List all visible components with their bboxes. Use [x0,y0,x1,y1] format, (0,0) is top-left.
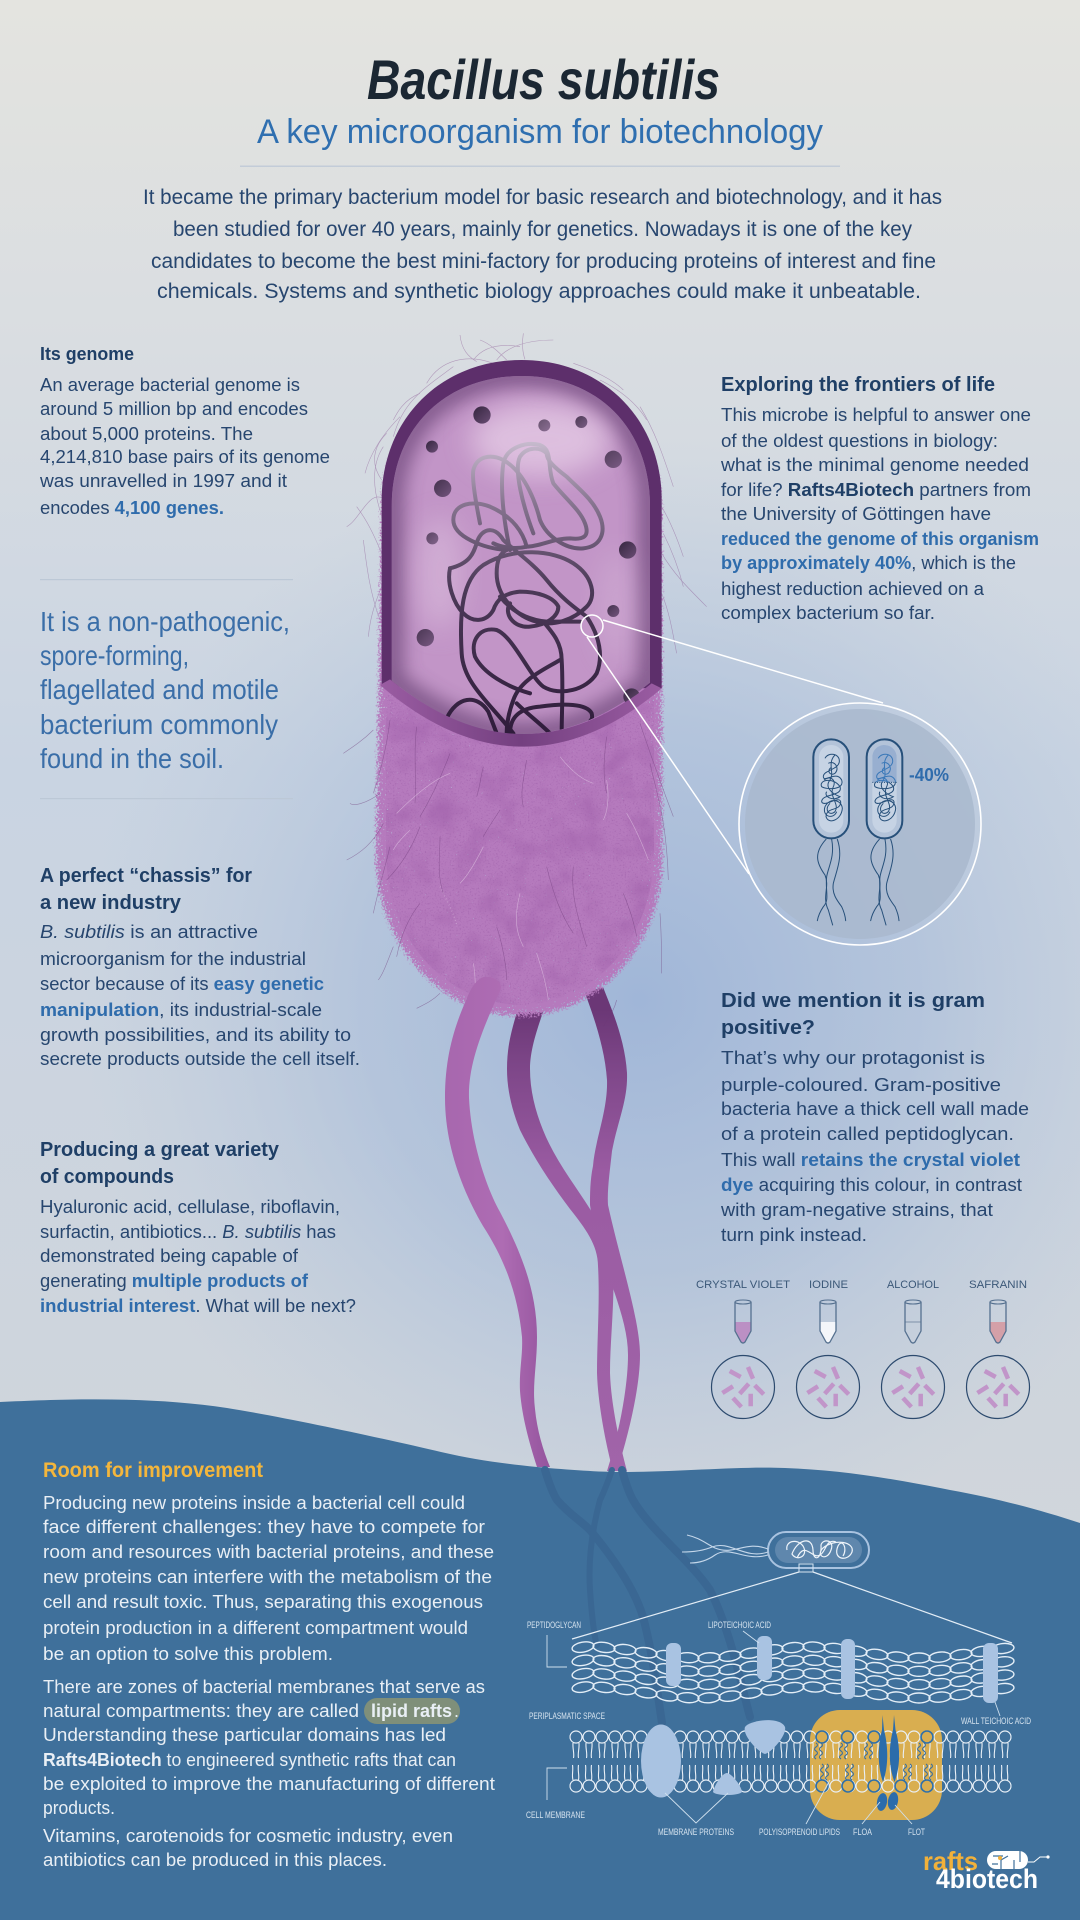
step: crystal violet [696,1279,790,1418]
text block: exploring the frontiers: of the oldest questions in biology: [721,431,998,451]
text block: compounds: Producing a great variety [40,1138,280,1161]
heading: room for improvement: Room for improvement [43,1459,263,1482]
intro paragraph: candidates to become the best mini-factory for producing proteins of interest and fine [151,249,936,273]
diagram labels: PEPTIDOGLYCAN [527,1620,581,1630]
diagram labels: POLYISOPRENOID LIPIDS [759,1827,840,1837]
text block: gram positive: dye acquiring this colour, in contrast [721,1175,1022,1195]
text block: compounds: Hyaluronic acid, cellulase, riboflavin, [40,1197,340,1217]
diagram labels: FLOT [908,1827,925,1837]
text block: compounds [40,1138,356,1316]
diagram labels: CELL MEMBRANE [526,1810,585,1820]
text block: its genome: An average bacterial genome is [40,375,300,395]
text block: chassis: manipulation , its industrial-scale [40,1000,322,1020]
text block: exploring the frontiers: reduced the genome of this organism [721,529,1039,549]
flagellum in front of cell [445,977,550,1467]
text block: compounds: surfactin, antibiotics... B. subtilis has [40,1222,336,1242]
lipid bilayer [570,1725,1012,1795]
text block: gram positive: purple-coloured. Gram-positive [721,1075,1001,1095]
intro paragraph [143,185,942,303]
text block: room for improvement: face different challenges: they have to compete for [43,1517,485,1537]
intro paragraph: chemicals. Systems and synthetic biology approaches could make it unbeatable. [157,279,921,303]
step: alcohol: ALCOHOL [887,1279,939,1291]
text block: exploring the frontiers: complex bacterium so far. [721,603,935,623]
text block: its genome: about 5,000 proteins. The [40,424,253,444]
text block: room for improvement: be exploited to improve the manufacturing of different [43,1774,495,1794]
flotillins FloA and FloT [876,1715,899,1812]
text block: its genome: 4,214,810 base pairs of its genome [40,447,330,467]
step: safranin: SAFRANIN [969,1279,1027,1291]
text block: chassis: growth possibilities, and its ability to [40,1025,351,1045]
callout: non-pathogenic statement: flagellated and motile [40,674,279,705]
text block: gram positive [720,989,1029,1245]
bottom panel: blue wave [0,1399,1080,1920]
title: Bacillus subtilis [367,48,720,111]
text block: room for improvement: antibiotics can be produced in this places. [43,1850,387,1870]
highlight: lipid rafts: . [454,1701,459,1721]
text block: room for improvement: Rafts4Biotech to engineered synthetic rafts that can [43,1750,456,1770]
flagella shadow in wave [545,1470,750,1723]
text block: gram positive: with gram-negative strains, that [720,1200,993,1220]
diagram labels: PERIPLASMATIC SPACE [529,1711,605,1721]
text block: compounds: industrial interest. What will be next? [40,1296,356,1316]
text block: room for improvement: Producing new proteins inside a bacterial cell could [43,1493,465,1513]
callout: non-pathogenic statement: It is a non-pathogenic, [40,606,290,637]
text block: compounds: demonstrated being capable of [40,1246,299,1266]
text block: exploring the frontiers: the University of Göttingen have [721,504,991,524]
text block: room for improvement: new proteins can interfere with the metabolism of the [43,1567,492,1587]
callout: non-pathogenic statement: found in the soil. [40,743,224,774]
fur mottling [386,695,654,1005]
step: iodine: IODINE [809,1279,848,1291]
text block: its genome [39,344,330,518]
diagram labels [526,1620,1031,1837]
label: -40%: -40% [909,765,949,785]
text block: room for improvement [43,1493,495,1870]
icon: full genome bacterium [813,739,849,925]
text block: exploring the frontiers: for life? Rafts4Biotech partners from [721,480,1031,500]
text block: exploring the frontiers: what is the minimal genome needed [720,455,1029,475]
membrane proteins [641,1720,785,1798]
icon: reduced genome bacterium [867,739,902,925]
text block: its genome: around 5 million bp and encodes [40,399,308,419]
diagram labels: MEMBRANE PROTEINS [658,1827,734,1837]
text block: room for improvement: Vitamins, carotenoids for cosmetic industry, even [43,1826,453,1846]
highlight: lipid rafts [364,1698,460,1724]
text block: chassis: a new industry [40,891,182,914]
illustration: bacterium cell [343,333,707,1027]
cytoplasm [392,376,650,734]
text block: compounds: of compounds [40,1165,174,1188]
text block: gram positive: This wall retains the crystal violet [721,1150,1020,1170]
logo: rafts4biotech: 4biotech [936,1864,1038,1894]
text block: room for improvement: Understanding these particular domains has led [43,1725,446,1745]
step: crystal violet: CRYSTAL VIOLET [696,1279,790,1291]
text block: gram positive: Did we mention it is gram [721,989,985,1012]
intro paragraph: It became the primary bacterium model for basic research and biotechnology, and it has [143,185,942,209]
chromosome [447,444,603,733]
text block: chassis: microorganism for the industrial [40,949,306,969]
diagram labels: WALL TEICHOIC ACID [961,1716,1031,1726]
text block: exploring the frontiers: highest reduction achieved on a [721,579,985,599]
highlight: lipid rafts: lipid rafts [371,1701,452,1721]
text block: room for improvement: products. [43,1798,115,1818]
text block: gram positive: That’s why our protagonist is [721,1048,985,1068]
text block: gram positive: positive? [721,1016,815,1039]
icon: small bacterium [682,1532,869,1572]
cross-section of cell [380,360,662,753]
text block: room for improvement: cell and result toxic. Thus, separating this exogenous [43,1592,483,1612]
step: safranin [966,1279,1030,1418]
step: alcohol [882,1279,944,1418]
fur hairs [343,720,673,1027]
furry outer wall silhouette [380,368,658,1012]
text block: gram positive: turn pink instead. [721,1225,867,1245]
teichoic acid bars [666,1636,998,1703]
zoom lines from chromosome to inset [581,615,883,874]
text block: room for improvement: There are zones of bacterial membranes that serve as [43,1677,485,1697]
diagram labels: LIPOTEICHOIC ACID [708,1620,771,1630]
text block: exploring the frontiers: Exploring the frontiers of life [721,373,995,396]
text block: its genome: was unravelled in 1997 and it [39,471,287,491]
diagram labels: FLOA [853,1827,872,1837]
subtitle: A key microorganism for biotechnology [257,113,823,151]
text block: room for improvement: protein production in a different compartment would [43,1618,468,1638]
text block: exploring the frontiers: by approximately 40%, which is the [721,553,1016,573]
inset: genome reduction [739,703,981,945]
diagram: cell envelope [526,1532,1031,1837]
crescent lip of cell wall [380,679,662,747]
text block: chassis [40,864,360,1069]
text block: room for improvement: room and resources with bacterial proteins, and these [43,1542,494,1562]
text block: chassis: B. subtilis is an attractive [40,922,258,942]
cell wall cut [382,360,662,688]
callout: non-pathogenic statement [40,606,290,774]
intro paragraph: been studied for over 40 years, mainly for genetics. Nowadays it is one of the key [173,217,912,241]
text block: compounds: generating multiple products of [40,1271,309,1291]
text block: exploring the frontiers: This microbe is helpful to answer one [721,405,1031,425]
raft lipids [814,1731,933,1792]
gram stain steps [696,1279,1030,1418]
logo: rafts4biotech: rafts [923,1846,978,1876]
leader lines [547,1631,1000,1824]
ribosome dots [417,406,640,705]
text block: room for improvement: natural compartments: they are called [43,1701,359,1721]
text block: its genome: Its genome [40,344,134,364]
text block: chassis: secrete products outside the cell itself. [40,1049,360,1069]
callout: non-pathogenic statement: bacterium commonly [40,709,278,740]
text block: gram positive: bacteria have a thick cell wall made [721,1099,1029,1119]
logo: rafts4biotech [923,1846,1050,1894]
step: iodine [796,1279,860,1418]
text block: chassis: sector because of its easy genetic [40,974,324,994]
peptidoglycan chains [571,1640,1014,1704]
lipid raft [810,1710,942,1820]
cell fringe: outer hairs [347,333,707,653]
text block: room for improvement: be an option to solve this problem. [43,1644,333,1664]
text block: gram positive: of a protein called peptidoglycan. [721,1124,1014,1144]
flagella behind the cell body [507,987,640,1471]
callout: non-pathogenic statement: spore-forming, [40,640,189,671]
text block: chassis: A perfect “chassis” for [40,864,252,887]
text block: its genome: encodes 4,100 genes. [40,498,224,518]
text block: exploring the frontiers [720,373,1039,623]
